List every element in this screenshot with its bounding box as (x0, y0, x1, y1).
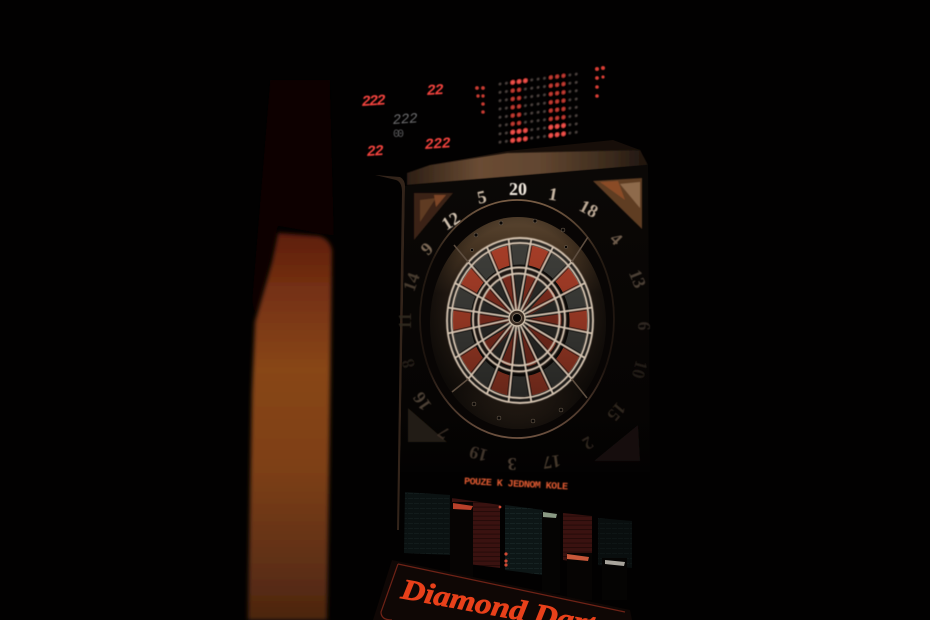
number 9: 9 (417, 239, 437, 259)
inner segments red (491, 287, 549, 354)
score: player three: 22 (366, 143, 384, 161)
board face (400, 165, 650, 472)
button 3 highlight (567, 554, 589, 561)
dartboard (420, 200, 614, 438)
dot matrix: left digit (475, 86, 485, 114)
number 17: 17 (542, 451, 562, 473)
plate side shadow (430, 217, 606, 429)
number 15: 15 (603, 399, 630, 425)
corner art: top left (414, 193, 453, 240)
number 6: 6 (634, 322, 654, 330)
wall pillar: lit orange strip (248, 233, 332, 620)
number 20: 20 (509, 179, 527, 199)
score: centre round counter: 222 (392, 111, 418, 129)
control panel (404, 492, 632, 600)
button 1 (450, 502, 473, 578)
number 8: 8 (397, 357, 419, 370)
cabinet hood (407, 150, 648, 185)
score: player one: 222 (361, 92, 386, 111)
cabinet side edge (375, 175, 405, 530)
number 12: 12 (438, 208, 464, 234)
number 3: 3 (508, 454, 516, 474)
corner art: bottom left (408, 408, 447, 442)
plate holes (470, 219, 568, 423)
number ring (395, 179, 654, 474)
button 4 highlight (605, 560, 625, 566)
button 4 (602, 558, 627, 600)
dot matrix: right digit (595, 66, 605, 98)
double ring (450, 241, 590, 400)
board outer rim (420, 200, 614, 438)
number 13: 13 (625, 267, 650, 291)
wire shadows (448, 239, 592, 402)
number 1: 1 (547, 183, 559, 205)
plate red outline (381, 564, 625, 620)
led score displays (361, 82, 451, 161)
button 1 highlight (453, 503, 473, 510)
button 2 (542, 512, 560, 593)
number 4: 4 (606, 229, 626, 249)
brand plate (373, 560, 632, 620)
hood upper ridge (430, 140, 640, 165)
bullseye (509, 310, 525, 326)
red status lights (499, 506, 508, 567)
score: centre small counter: 00 (393, 129, 404, 141)
treble ring (475, 270, 565, 371)
number 5: 5 (475, 186, 488, 208)
panel: left instructions (404, 492, 450, 555)
spider wires (447, 238, 593, 403)
dot matrix display (497, 69, 579, 147)
segment ring base (449, 240, 591, 400)
score: player two: 22 (426, 82, 444, 100)
outer segments red (453, 245, 587, 396)
number 19: 19 (467, 442, 490, 466)
number 10: 10 (628, 358, 652, 381)
led message strip: POUZE K JEDNOM KOLE (464, 477, 568, 493)
panel: right instructions (598, 518, 632, 568)
number 11: 11 (395, 312, 415, 330)
plate body (373, 560, 632, 620)
number 7: 7 (434, 422, 453, 444)
corner art: bottom right (594, 425, 640, 461)
number 16: 16 (409, 388, 435, 415)
board plate (430, 217, 606, 429)
outer spider arms (452, 237, 588, 398)
outer segments grey (462, 254, 578, 386)
panel: centre game list (505, 505, 543, 575)
inner segments grey (494, 292, 546, 350)
wire rings (447, 238, 593, 403)
number 18: 18 (576, 196, 601, 222)
button 3 (567, 553, 592, 600)
number 14: 14 (399, 270, 424, 294)
score: player four: 222 (424, 135, 451, 154)
corner art: top right (593, 178, 642, 229)
wall pillar: unlit upper part (252, 80, 334, 320)
button 2 highlight (543, 512, 557, 518)
lower board shade (446, 236, 594, 404)
number 2: 2 (579, 432, 597, 454)
panel: red option list (563, 513, 592, 564)
panel: red game list (452, 498, 500, 568)
